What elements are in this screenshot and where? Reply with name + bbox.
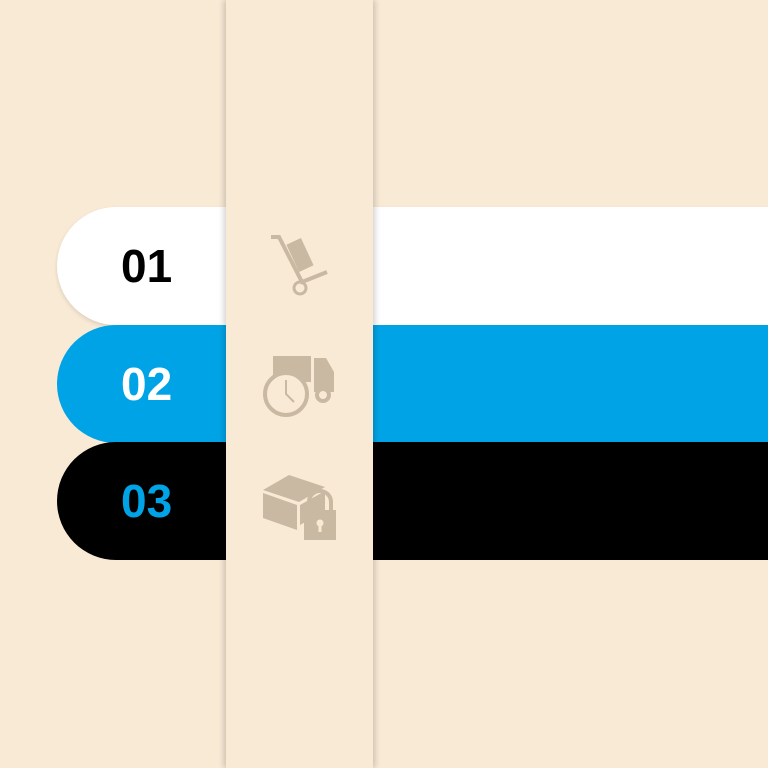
number 03: 03 — [121, 475, 172, 527]
number 02: 02 — [121, 358, 172, 410]
number 01: 01 — [121, 240, 172, 292]
band 02 blue — [57, 325, 768, 443]
icon: box with lock — [263, 475, 336, 540]
vertical strip — [226, 0, 373, 768]
icon: truck with clock — [265, 356, 334, 415]
band 01 white — [57, 207, 768, 325]
icon: hand truck — [271, 237, 327, 294]
band 03 black — [57, 442, 768, 560]
icons — [263, 235, 336, 540]
